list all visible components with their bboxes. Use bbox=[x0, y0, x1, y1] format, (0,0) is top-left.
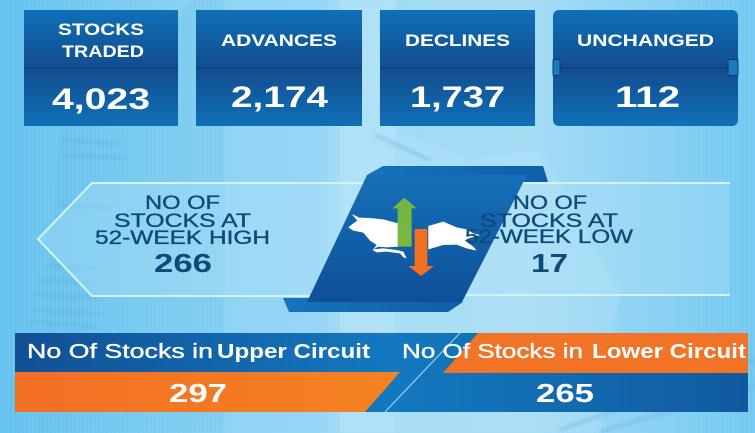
icon: bull bbox=[348, 214, 480, 258]
panel: unchanged bbox=[553, 10, 738, 126]
panel: circuit bar bbox=[15, 333, 748, 412]
icon: orange down arrow bbox=[408, 229, 434, 276]
value: 297: 297 bbox=[169, 378, 227, 408]
value: 1,737: 1,737 bbox=[410, 81, 505, 114]
text: 52-week high bbox=[95, 193, 270, 278]
clip: left bbox=[553, 60, 560, 76]
heading: 52-week low: NO OF bbox=[513, 193, 587, 214]
diagonal divider bbox=[385, 333, 460, 412]
value: 17: 17 bbox=[531, 248, 568, 278]
upper circuit value band bbox=[15, 372, 400, 412]
value: 266: 266 bbox=[154, 248, 212, 278]
value: 265: 265 bbox=[536, 378, 594, 408]
heading: lower circuit: Lower Circuit bbox=[592, 341, 746, 363]
panel: 52-week low box bbox=[440, 183, 730, 295]
label: unchanged: UNCHANGED bbox=[577, 32, 714, 50]
parallelogram bbox=[307, 175, 527, 302]
label: declines: DECLINES bbox=[405, 32, 510, 50]
heading: 52-week high: STOCKS AT bbox=[114, 211, 252, 232]
text: 52-week low bbox=[465, 193, 633, 278]
top fold bbox=[367, 166, 548, 182]
heading: 52-week high: 52-WEEK HIGH bbox=[95, 228, 270, 249]
central emblem bbox=[283, 166, 548, 312]
heading: upper circuit: Upper Circuit bbox=[217, 341, 370, 363]
panel: advances bbox=[196, 10, 362, 126]
panel: declines bbox=[380, 10, 535, 126]
heading: 52-week low: STOCKS AT bbox=[480, 211, 619, 232]
icon: green up arrow bbox=[392, 198, 417, 247]
value: 4,023: 4,023 bbox=[52, 83, 150, 116]
bottom fold bbox=[283, 298, 463, 312]
value: 112: 112 bbox=[615, 81, 680, 114]
heading: lower circuit: No Of Stocks in bbox=[402, 341, 583, 363]
heading: upper circuit: No Of Stocks in bbox=[27, 341, 213, 363]
panel: 52-week high arrow box bbox=[38, 183, 375, 296]
lower circuit heading band bbox=[443, 333, 748, 373]
value: 2,174: 2,174 bbox=[231, 81, 328, 114]
clip: right bbox=[728, 60, 738, 76]
heading: 52-week low: 52-WEEK LOW bbox=[465, 227, 633, 248]
label: stocks traded: TRADED bbox=[62, 43, 144, 61]
heading: 52-week high: NO OF bbox=[145, 193, 220, 214]
label: stocks traded: STOCKS bbox=[58, 21, 144, 39]
panel: stocks traded bbox=[24, 10, 178, 126]
label: advances: ADVANCES bbox=[221, 32, 337, 50]
